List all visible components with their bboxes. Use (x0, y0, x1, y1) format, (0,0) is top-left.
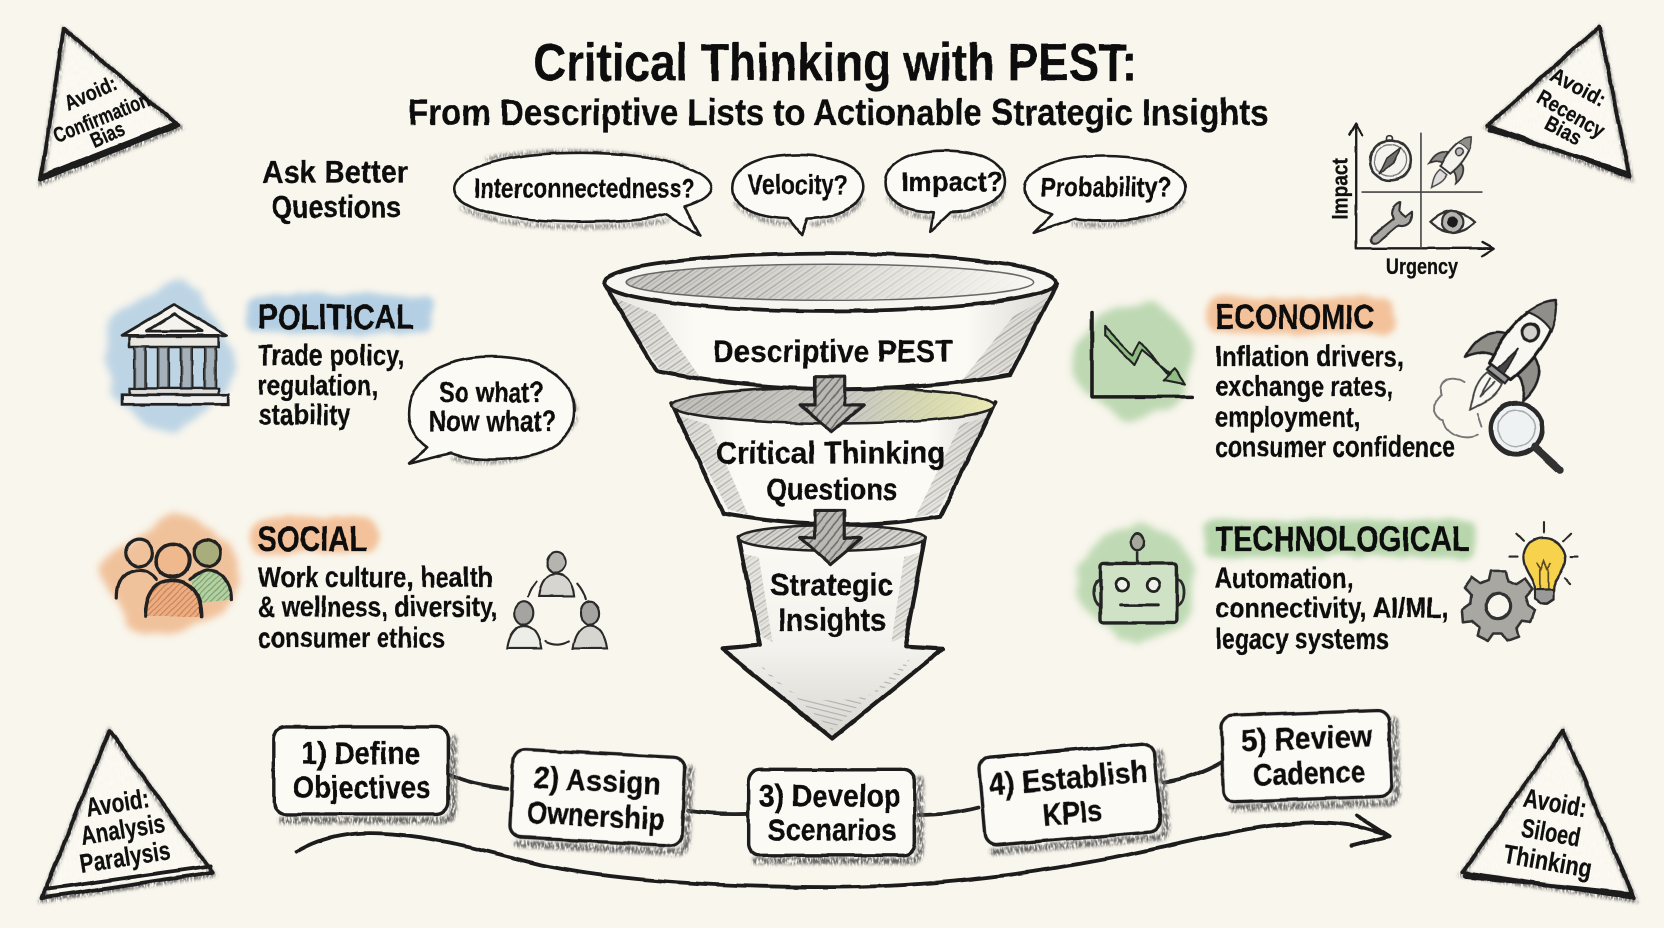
speech bubble: impact (885, 151, 1005, 231)
warning triangle: analysis paralysis: Avoid: (84, 783, 151, 823)
text: political factors: stability (258, 399, 351, 431)
speech bubble: interconnectedness (454, 152, 711, 236)
text: technological factors: Automation, (1215, 563, 1353, 595)
matrix dividers (1362, 133, 1483, 248)
arrow: descriptive to critical thinking (800, 377, 864, 432)
speech bubble: velocity (732, 155, 864, 236)
icon: rocket launch (1434, 277, 1585, 437)
wash: economic (1076, 301, 1197, 422)
speech bubble: so what now what: So what? (439, 377, 544, 409)
funnel tier 3: strategic insights arrow: Strategic (770, 566, 894, 602)
funnel tier 2: critical thinking questions: Critical Thinking (716, 435, 946, 471)
speech bubble: probability (1024, 156, 1185, 232)
warning triangle: analysis paralysis: Paralysis (77, 835, 172, 879)
warning triangle: confirmation bias: Bias (87, 118, 128, 153)
funnel tier 2: critical thinking questions: Questions (766, 471, 898, 507)
step 2: assign ownership: 2) Assign (533, 759, 662, 802)
icon: gear (1462, 571, 1534, 641)
heading: ask better questions: Ask Better (263, 154, 408, 190)
text: social factors (258, 562, 498, 654)
heading highlight: technological (1203, 520, 1475, 557)
text: economic factors: consumer confidence (1215, 431, 1455, 463)
icon: wrench (1371, 202, 1413, 243)
panel: political (104, 282, 433, 433)
icon: group of people (117, 540, 231, 617)
speech bubble: interconnectedness: Interconnectedness? (474, 172, 695, 203)
warning triangle: recency bias: Bias (1541, 112, 1585, 150)
heading: technological: TECHNOLOGICAL (1215, 520, 1470, 559)
warning triangle: siloed thinking: Avoid: (1521, 783, 1589, 823)
step 5: review cadence: Cadence (1252, 753, 1366, 793)
icon: falling chart (1092, 313, 1192, 397)
warning triangle: siloed thinking (1462, 730, 1634, 900)
speech bubble: so what now what (409, 357, 575, 464)
step 4: establish KPIs: KPIs (1041, 792, 1103, 833)
funnel tier 3: strategic insights arrow: Insights (778, 601, 886, 637)
text: political factors: Trade policy, (258, 340, 404, 372)
warning triangle: recency bias: Recency (1533, 86, 1609, 143)
arrow: continuous process swoosh (296, 816, 1389, 887)
warning triangle: analysis paralysis (42, 730, 212, 900)
funnel (604, 254, 1057, 739)
chart: impact and urgency matrix (1328, 124, 1494, 279)
title: From Descriptive Lists to Actionable Strategic Insights (408, 91, 1269, 133)
step 3: develop scenarios (748, 769, 920, 861)
warning triangle: siloed thinking: Thinking (1501, 839, 1594, 884)
funnel tier 2: critical thinking questions (672, 387, 995, 525)
step 5: review cadence (1221, 710, 1397, 808)
step 4: establish KPIs: 4) Establish (987, 753, 1149, 802)
speech bubble: velocity: Velocity? (748, 169, 848, 200)
text: social factors: consumer ethics (258, 622, 445, 654)
text: social factors: Work culture, health (258, 562, 492, 594)
text: economic factors: exchange rates, (1215, 371, 1393, 403)
axis label: urgency: Urgency (1386, 254, 1459, 279)
heading highlight: social (250, 517, 380, 553)
step 3: develop scenarios: 3) Develop (759, 777, 901, 813)
warning triangle: recency bias (1488, 27, 1630, 178)
step 1: define objectives (274, 727, 453, 820)
title: Critical Thinking with PEST: (533, 34, 1137, 93)
text: political factors: regulation, (258, 370, 378, 402)
arrow: critical thinking to strategic insights (800, 510, 862, 565)
panel: economic (1076, 297, 1455, 463)
text: economic factors: Inflation drivers, (1215, 341, 1404, 373)
text: social factors: & wellness, diversity, (258, 592, 498, 624)
speech bubble: so what now what: Now what? (429, 406, 556, 438)
process connectors (450, 762, 1223, 815)
icon: robot (1093, 533, 1184, 623)
panel: social (103, 514, 498, 654)
heading: ask better questions (263, 154, 408, 225)
wash: technological (1074, 520, 1197, 649)
warning triangle: siloed thinking: Siloed (1519, 813, 1583, 853)
speech bubble: impact: Impact? (901, 166, 1003, 197)
step 2: assign ownership (509, 749, 691, 853)
text: political factors (258, 340, 404, 431)
heading: political: POLITICAL (258, 298, 414, 337)
panel: technological (1074, 520, 1475, 655)
heading highlight: political (246, 295, 433, 333)
wash: political (104, 282, 236, 433)
warning triangle: confirmation bias: Confirmation (50, 88, 153, 148)
funnel tier 1: descriptive PEST (604, 254, 1057, 389)
icon: magnifying glass (1491, 403, 1560, 470)
step 1: define objectives: Objectives (293, 769, 431, 805)
heading highlight: economic (1207, 297, 1393, 334)
icon: light bulb (1509, 522, 1578, 604)
title (408, 34, 1269, 133)
step 2: assign ownership: Ownership (526, 794, 665, 837)
step 1: define objectives: 1) Define (301, 735, 420, 771)
icon: small rocket (1418, 127, 1484, 198)
speech bubble: probability: Probability? (1041, 171, 1171, 202)
text: economic factors (1215, 341, 1455, 463)
matrix axes (1350, 124, 1494, 256)
step 5: review cadence: 5) Review (1240, 718, 1373, 758)
warning triangle: recency bias: Avoid: (1546, 64, 1610, 112)
text: technological factors: legacy systems (1215, 623, 1389, 655)
heading: ask better questions: Questions (272, 189, 401, 225)
heading: economic: ECONOMIC (1215, 298, 1374, 337)
step 4: establish KPIs (978, 742, 1167, 852)
wash: social (103, 514, 238, 639)
step 3: develop scenarios: Scenarios (768, 811, 896, 847)
icon: eye (1431, 211, 1475, 232)
text: technological factors: connectivity, AI/ML, (1215, 593, 1449, 625)
warning triangle: confirmation bias (40, 29, 179, 183)
icon: government building (122, 305, 228, 404)
warning triangle: confirmation bias: Avoid: (61, 72, 121, 116)
axis label: impact: Impact (1328, 158, 1353, 220)
text: technological factors (1215, 563, 1449, 655)
funnel tier 1: descriptive PEST: Descriptive PEST (713, 333, 953, 369)
warning triangle: analysis paralysis: Analysis (79, 808, 167, 851)
heading: social: SOCIAL (258, 520, 367, 559)
funnel tier 3: strategic insights arrow (722, 525, 943, 739)
text: economic factors: employment, (1215, 402, 1360, 434)
icon: compass (1370, 135, 1410, 180)
icon: connected team (507, 552, 607, 648)
